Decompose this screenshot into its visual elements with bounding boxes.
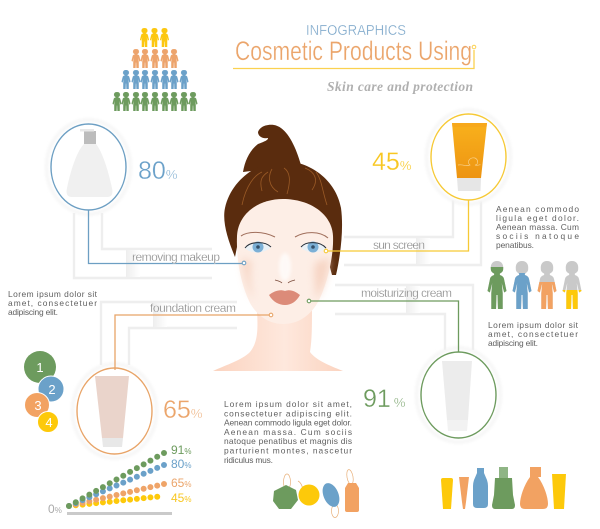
ring — [431, 114, 506, 200]
value 65: 65% — [171, 476, 191, 490]
icon: beige tube — [95, 376, 129, 447]
price tags — [273, 469, 359, 518]
text block: right top: Aenean commodo — [496, 204, 579, 214]
subtitle: Skin care and protection — [327, 79, 473, 94]
dot — [269, 313, 273, 317]
value 91: 91% — [171, 443, 191, 457]
left eye — [245, 242, 271, 252]
text block: centre: ridiculus mus. — [224, 455, 273, 465]
bubble 4: 4 — [45, 415, 53, 430]
lips — [269, 290, 300, 305]
connector — [88, 210, 244, 264]
text block: right top — [496, 204, 579, 250]
connector — [309, 301, 458, 352]
people share icons — [488, 261, 582, 309]
orange pump bottle — [520, 467, 548, 509]
text block: centre: consectetuer adipiscing elit. — [224, 408, 352, 418]
text block: centre: Lorem ipsum dolor sit amet, — [224, 399, 352, 409]
hair — [224, 161, 342, 275]
nose — [275, 280, 295, 283]
text block: right top: sociis natoque — [496, 231, 579, 241]
dot — [242, 261, 246, 265]
callout: moisturizing cream — [307, 286, 500, 442]
ring — [421, 352, 496, 438]
text block: right lower: amet, consectetuer — [488, 329, 578, 339]
baseline — [67, 512, 172, 515]
icon: orange tube — [452, 123, 487, 191]
callout: sun screen — [324, 110, 510, 253]
text block: right top: penatibus. — [496, 240, 534, 250]
text block: left: adipiscing elit. — [8, 307, 58, 317]
green pump bottle — [492, 467, 515, 509]
blue bottle — [473, 468, 488, 508]
title dot — [472, 45, 476, 49]
dot — [324, 249, 328, 253]
eyebrow heading: INFOGRAPHICS — [306, 23, 406, 39]
value 45: 45% — [171, 491, 191, 505]
connector — [326, 200, 468, 251]
percentage: 80% — [138, 157, 178, 185]
neck — [213, 310, 343, 371]
title block — [233, 23, 476, 94]
text block: centre: Aenean massa. Cum sociis — [224, 427, 352, 437]
nose highlight — [279, 253, 291, 281]
bubble 1: 1 — [36, 360, 44, 375]
face illustration — [213, 125, 343, 371]
connector frames — [74, 200, 481, 365]
green tag — [273, 474, 298, 509]
bubble 3: 3 — [34, 398, 42, 413]
text block: centre: Aenean commodo ligula eget dolor. — [224, 418, 352, 428]
text block: right top: Aenean massa. Cum — [496, 222, 579, 232]
text block: right lower — [488, 320, 579, 348]
orange tag — [345, 469, 359, 512]
text block: left: amet, consectetuer — [8, 298, 97, 308]
halo — [46, 120, 130, 214]
orange tube — [459, 477, 469, 509]
callout: foundation cream — [72, 301, 273, 458]
icon: white tube — [442, 361, 472, 431]
text block: centre: parturient montes, nascetur — [224, 446, 352, 456]
orange series — [69, 484, 164, 506]
blue series — [69, 465, 164, 506]
ring — [77, 368, 152, 454]
value 80: 80% — [171, 457, 191, 471]
product silhouettes — [441, 467, 566, 509]
numbered bubbles legend — [24, 351, 64, 432]
halo — [72, 364, 156, 458]
hair strands — [242, 168, 327, 205]
percentage: 65% — [163, 396, 203, 424]
yellow series — [69, 496, 164, 506]
right eye — [301, 242, 326, 252]
label: sun screen — [373, 238, 425, 252]
blue tag — [319, 481, 343, 518]
dotted line chart — [48, 443, 191, 516]
percentage: 45% — [372, 148, 412, 176]
bubble 2: 2 — [48, 382, 56, 397]
label: moisturizing cream — [361, 286, 452, 300]
green series — [69, 453, 164, 506]
callout: removing makeup — [46, 120, 246, 265]
icon: pump bottle — [67, 129, 112, 197]
yellow tube — [441, 478, 453, 509]
eyebrows — [241, 232, 328, 238]
text block: right top: ligula eget dolor. — [496, 213, 579, 223]
text block: right lower: adipiscing elit. — [488, 338, 538, 348]
yellow flat tube — [552, 474, 566, 509]
hair bun — [243, 125, 301, 172]
text block: left: Lorem ipsum dolor sit — [8, 289, 98, 299]
cheek contours — [242, 258, 330, 300]
main title: Cosmetic Products Using — [235, 36, 472, 66]
connector — [115, 315, 271, 370]
text block: centre — [224, 399, 352, 465]
title underline — [233, 50, 474, 68]
people pyramid — [112, 28, 198, 111]
face — [237, 199, 333, 324]
yellow tag — [298, 481, 320, 506]
text block: left — [8, 289, 98, 317]
text block: centre: natoque penatibus et magnis dis — [224, 436, 352, 446]
dot — [307, 299, 311, 303]
percentage: 91% — [363, 385, 406, 413]
zero label: 0% — [48, 502, 62, 516]
ring — [51, 124, 126, 210]
halo — [426, 110, 510, 204]
label: foundation cream — [150, 301, 236, 315]
halo — [416, 348, 500, 442]
label: removing makeup — [132, 250, 220, 264]
text block: right lower: Lorem ipsum dolor sit — [488, 320, 579, 330]
